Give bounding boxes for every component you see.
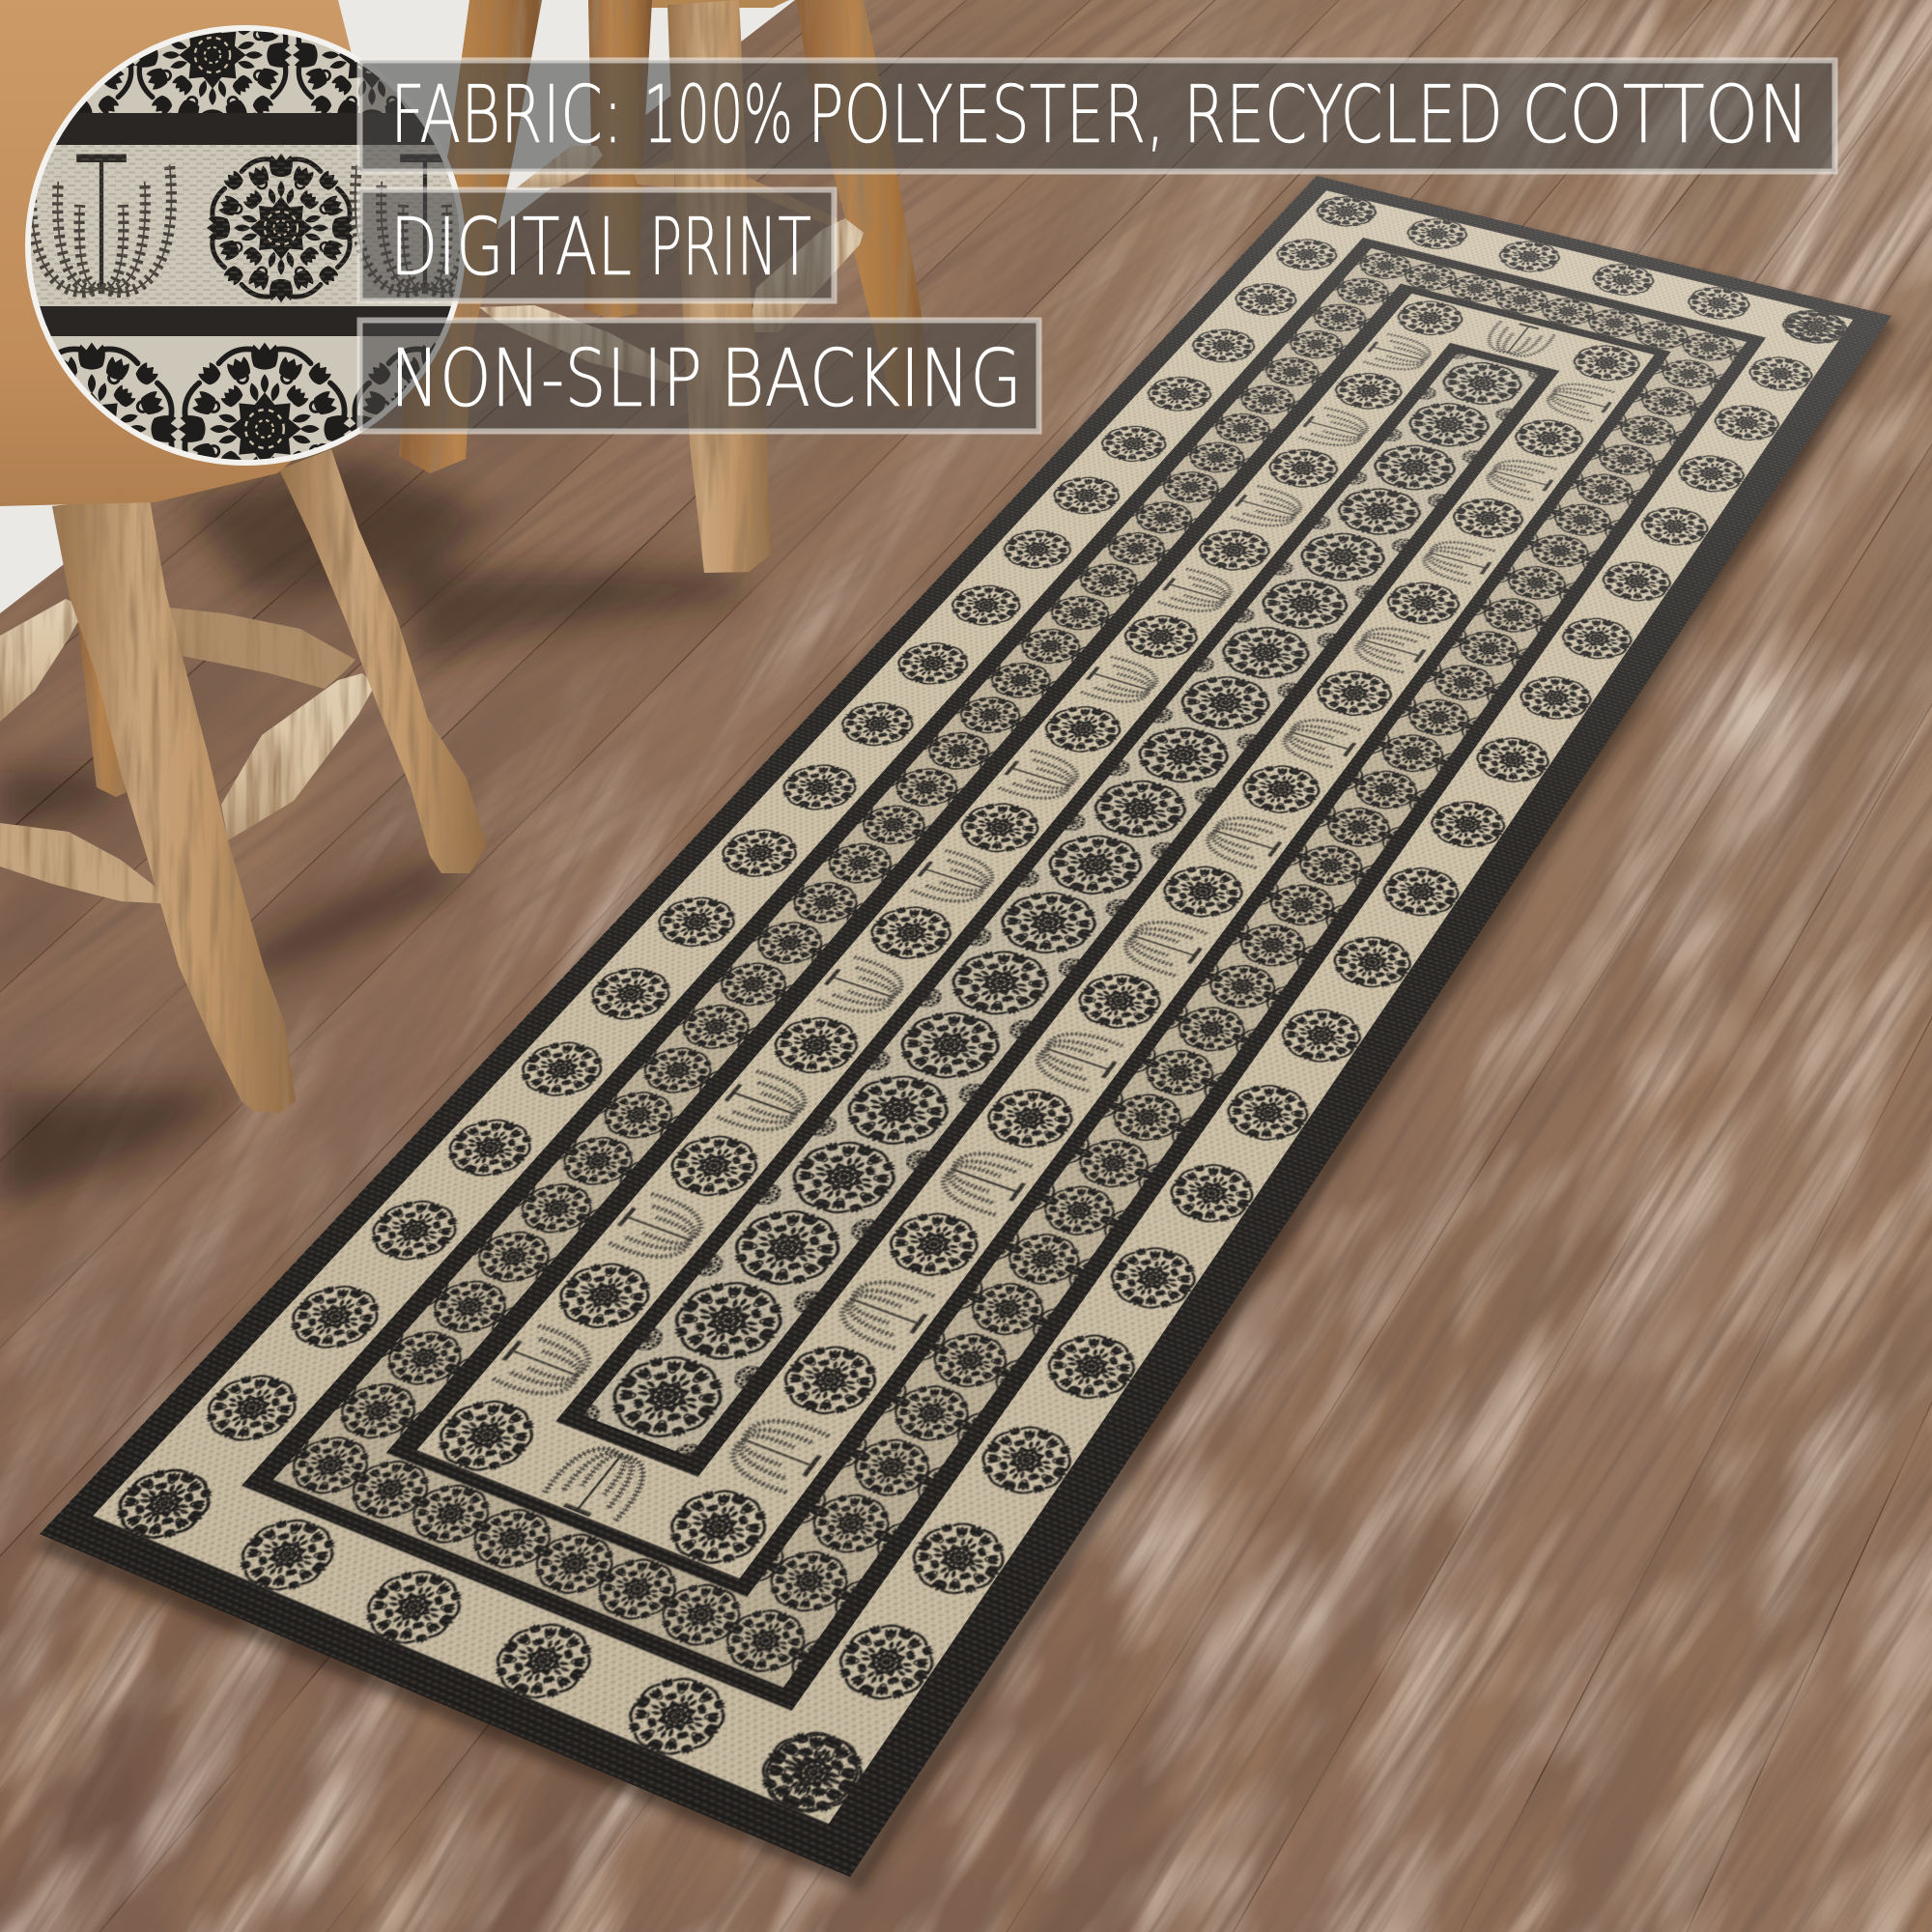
front stool rear leg — [77, 618, 137, 797]
first black ring — [242, 238, 1766, 1711]
close-up medallion — [207, 154, 355, 302]
label: digital print: DIGITAL — [390, 202, 632, 294]
back stool seat lip — [615, 0, 789, 8]
second black ring — [386, 284, 1671, 1597]
front stool legs — [52, 449, 487, 1113]
chair seat — [0, 0, 362, 506]
label: digital print: PRINT — [649, 202, 811, 294]
inset circle: fabric close-up — [25, 25, 1837, 466]
front stool crossbars — [0, 599, 376, 904]
label: non-slip backing: NON-SLIP — [390, 333, 702, 425]
label: fabric: 100% — [643, 70, 793, 161]
close-up black stripes — [40, 113, 451, 336]
back stool front leg — [668, 0, 771, 573]
lace pattern band — [273, 248, 1747, 1688]
close-up circle outline — [28, 28, 463, 463]
label: non-slip backing — [359, 321, 1039, 431]
label: fabric: RECYCLED — [1183, 70, 1503, 161]
inner beige band with medallions and willows — [417, 294, 1655, 1578]
back stool crossbars — [479, 146, 864, 384]
floor wood grain, left part — [0, 0, 1564, 1466]
close-up upper lace — [76, 31, 413, 113]
white wall — [0, 0, 795, 613]
close-up willow — [32, 158, 171, 293]
stool shadows — [0, 454, 744, 1212]
back stool rear legs — [399, 0, 933, 473]
label: fabric: COTTON — [1521, 70, 1809, 161]
close-up second willow — [355, 158, 495, 293]
centre block black frame — [555, 343, 1559, 1477]
close-up lower lace — [58, 342, 436, 460]
label: digital print — [359, 189, 835, 301]
centre lace panel — [582, 353, 1540, 1457]
label: non-slip backing: BACKING — [721, 333, 1022, 425]
label: fabric — [359, 60, 1835, 172]
label: fabric: FABRIC: — [390, 70, 623, 161]
label: fabric: POLYESTER, — [808, 70, 1165, 161]
